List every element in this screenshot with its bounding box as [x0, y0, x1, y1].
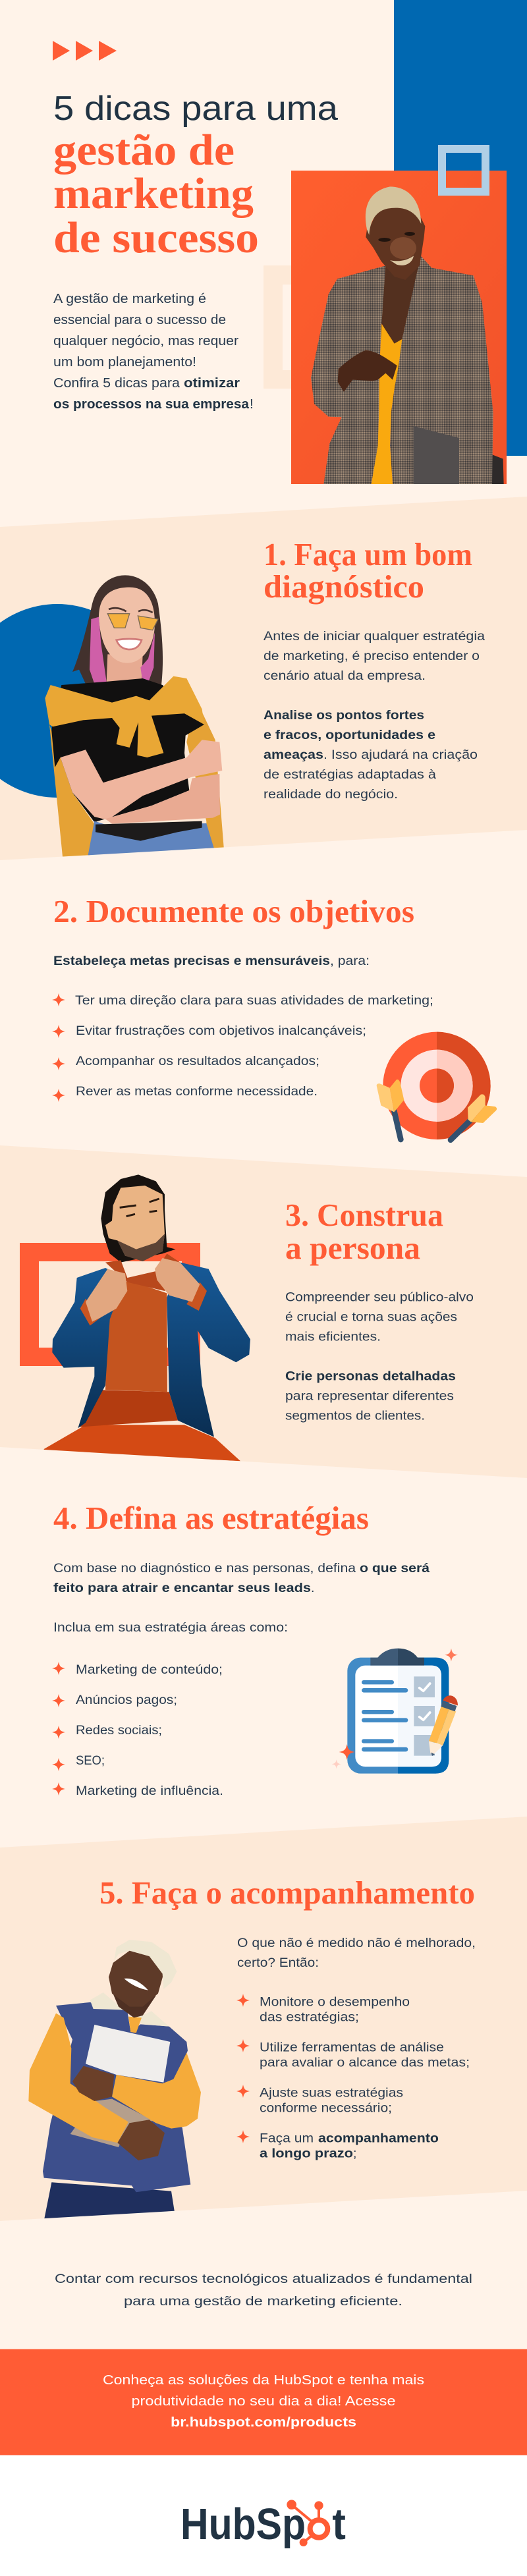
tip 5 list text: [260, 1994, 470, 2160]
tip 3 text: mais eficientes.: [285, 1329, 381, 1344]
left hand: [86, 1269, 127, 1322]
tip 3 text: Compreender seu público-alvo: [285, 1290, 474, 1304]
right sleeve: [112, 2053, 201, 2129]
tip 4 list text: Redes sociais;: [76, 1723, 162, 1738]
hand top: [72, 2066, 114, 2101]
tip 1 text: e fracos, oportunidades e: [264, 728, 435, 742]
smile: [117, 639, 142, 649]
tip 2 list text: Acompanhar os resultados alcançados;: [76, 1054, 319, 1068]
tip 1 heading: [264, 536, 472, 605]
glasses: [107, 614, 158, 630]
tip 2 intro: , para:: [330, 954, 370, 968]
blazer: [311, 256, 493, 484]
laptop back: [487, 453, 504, 484]
tip 5 list text: para avaliar o alcance das metas;: [260, 2055, 470, 2069]
pants waist: [79, 1390, 178, 1427]
hair: [72, 575, 163, 685]
tip 1 text: Analise os pontos fortes: [264, 708, 424, 723]
beard: [117, 1234, 165, 1261]
tip 1 text: ameaças: [264, 748, 323, 762]
tip 1 heading: diagnóstico: [264, 568, 424, 605]
left sleeve: [28, 2014, 128, 2143]
face: [99, 588, 155, 663]
icon: target with darts: [377, 1032, 497, 1140]
orange photo background: [291, 171, 507, 484]
tip 5 list text: conforme necessário;: [260, 2101, 392, 2116]
tip 5 heading: 5. Faça o acompanhamento: [99, 1875, 475, 1911]
sweater neck: [128, 2017, 142, 2033]
panel: call to action: produtividade no seu dia a dia! Acesse: [132, 2394, 395, 2409]
tip 4 list text: [76, 1662, 223, 1798]
tip 4 list bullets: [52, 1662, 65, 1795]
intro text: A gestão de marketing é: [53, 291, 206, 306]
tip 3 heading: [285, 1197, 443, 1266]
intro text: otimizar: [184, 375, 240, 391]
tip 4 heading: 4. Defina as estratégias: [53, 1500, 369, 1536]
t-shirt: [51, 678, 204, 822]
tip 2 heading: 2. Documente os objetivos: [53, 893, 414, 929]
sweater knot: [45, 676, 204, 757]
intro text: qualquer negócio, mas requer: [53, 333, 238, 348]
upper forearm: [61, 740, 222, 820]
belt: [96, 821, 202, 841]
dress: [372, 324, 402, 484]
hand bottom: [117, 2120, 165, 2160]
title: gestão de: [53, 126, 235, 175]
collar: [105, 1253, 180, 1291]
tip 4 intro: [53, 1561, 430, 1635]
panel: tip 5 band: [0, 1817, 527, 2221]
smile: [124, 1979, 148, 1990]
tip 3 text: para representar diferentes: [285, 1388, 454, 1403]
logo: HubSpot: HubSp: [180, 2500, 306, 2549]
lower forearm: [105, 774, 220, 824]
closing statement: Contar com recursos tecnológicos atualizados é fundamental: [55, 2272, 472, 2286]
tip 2 list bullets: [52, 993, 65, 1102]
tip 5 list text: Utilize ferramentas de análise: [260, 2041, 444, 2055]
tip 3 text: é crucial e torna suas ações: [285, 1309, 457, 1324]
tip 1 heading: 1. Faça um bom: [264, 536, 472, 572]
fleece collar: [90, 1992, 169, 2027]
tip 5 intro: [237, 1936, 476, 1970]
face: [109, 1951, 163, 2007]
orange square outline: [20, 1243, 200, 1366]
tip 3 heading: 3. Construa: [285, 1197, 443, 1233]
tip 5 list text: acompanhamento: [318, 2131, 439, 2146]
tip 1 text: de estratégias adaptadas à: [264, 767, 436, 782]
smile: [390, 256, 414, 265]
title: [53, 90, 338, 262]
logo: HubSpot: t: [332, 2500, 346, 2549]
beige square outline: [264, 265, 303, 389]
panel: hero: [0, 0, 527, 860]
tip 4 intro: feito para atrair e encantar seus leads: [53, 1581, 311, 1595]
tip 4 list text: Marketing de conteúdo;: [76, 1662, 223, 1677]
face highlight: [390, 237, 416, 259]
photo: man with laptop: [28, 1940, 201, 2221]
tip 2 list text: [75, 993, 433, 1099]
eye: [404, 232, 415, 236]
tip 5 list text: das estratégias;: [260, 2010, 359, 2025]
jeans: [44, 2182, 175, 2221]
tip 1 text: de marketing, é preciso entender o: [264, 649, 480, 663]
tip 5 list text: Monitore o desempenho: [260, 1994, 410, 2009]
tip 2 intro: Estabeleça metas precisas e mensuráveis: [53, 954, 330, 968]
icon: clipboard and pencil: [332, 1649, 458, 1774]
tip 1 text: Antes de iniciar qualquer estratégia: [264, 629, 485, 644]
neck: [113, 1994, 156, 2018]
tip 4 intro: Com base no diagnóstico e nas personas, defina: [53, 1561, 356, 1576]
intro text: essencial para o sucesso de: [53, 312, 226, 327]
blue rectangle: [394, 0, 527, 456]
sweater back: [49, 698, 224, 857]
tip 1 text: cenário atual da empresa.: [264, 669, 426, 683]
panel: tip 2: [52, 893, 497, 1140]
closing statement: para uma gestão de marketing eficiente.: [124, 2294, 402, 2309]
eyebrow: [109, 608, 153, 613]
tip 1 text: [264, 629, 485, 802]
tip 4 intro: .: [311, 1581, 314, 1595]
vest: [43, 2002, 190, 2192]
panel: call to action: Conheça as soluções da HubSpot e tenha mais: [103, 2373, 424, 2388]
tip 5 list text: Ajuste suas estratégias: [260, 2085, 403, 2100]
panel: tip 3 band: [0, 1145, 527, 1478]
panel: tip 4: [52, 1500, 458, 1798]
face: [105, 1186, 165, 1260]
tip 2 list text: Ter uma direção clara para suas atividades de marketing;: [75, 993, 433, 1008]
hair: [366, 186, 421, 235]
eyebrows and eyes: [120, 1199, 159, 1217]
panel: call to action: br.hubspot.com/products: [171, 2415, 356, 2430]
hair: [101, 1174, 176, 1263]
tip 4 list text: Anúncios pagos;: [76, 1693, 177, 1707]
title: de sucesso: [53, 213, 259, 262]
tip 5 list text: Faça um: [260, 2131, 314, 2146]
photo: woman with glasses: [45, 575, 224, 857]
pink hair strands: [90, 617, 155, 684]
sweater: [105, 1280, 167, 1392]
panel: call to action: [0, 2349, 527, 2455]
laptop: [414, 426, 459, 484]
jacket right: [167, 1263, 250, 1437]
footer background: [0, 2455, 527, 2576]
photo: man in blue blazer: [44, 1174, 250, 1461]
hat: [114, 1940, 177, 1989]
laptop bottom: [70, 2099, 153, 2147]
jacket left: [52, 1268, 113, 1428]
tip 4 intro: Inclua em sua estratégia áreas como:: [53, 1620, 288, 1635]
closing statement: [55, 2272, 472, 2309]
intro text: um bom planejamento!: [53, 354, 196, 370]
tip 1 text: . Isso ajudará na criação: [323, 748, 478, 762]
tip 3 text: segmentos de clientes.: [285, 1408, 425, 1423]
jeans: [88, 821, 214, 856]
light blue square outline: [438, 145, 489, 196]
eye: [378, 238, 391, 242]
title: marketing: [53, 169, 254, 218]
title: 5 dicas para uma: [53, 90, 338, 128]
tip 4 list text: Marketing de influência.: [76, 1784, 223, 1798]
intro text: os processos na sua empresa: [53, 397, 250, 412]
tip 3 text: Crie personas detalhadas: [285, 1369, 456, 1383]
tip 5 intro: O que não é medido não é melhorado,: [237, 1936, 476, 1950]
tip 5 list text: ;: [353, 2146, 356, 2160]
laptop top: [86, 2025, 170, 2083]
tip 4 intro: o que será: [360, 1561, 430, 1576]
intro text: Confira 5 dicas para: [53, 375, 180, 391]
neck and chest: [381, 259, 421, 346]
tip 2 list text: Evitar frustrações com objetivos inalcançáveis;: [76, 1024, 366, 1038]
tip 1 text: realidade do negócio.: [264, 787, 398, 802]
arrows icon: [53, 41, 117, 61]
intro text: [53, 291, 254, 412]
tip 5 intro: certo? Então:: [237, 1956, 319, 1970]
face: [366, 207, 425, 280]
blue circle: [0, 604, 154, 798]
tip 5 list text: a longo prazo: [260, 2146, 353, 2160]
right hand: [155, 1258, 200, 1302]
pants: [44, 1425, 240, 1461]
tip 4 list text: SEO;: [76, 1753, 105, 1768]
panel: tip 1 band: [0, 497, 527, 860]
tip 3 text: [285, 1290, 474, 1423]
photo: woman in checked blazer: [311, 186, 504, 484]
tip 5 list bullets: [236, 1994, 250, 2143]
neck: [107, 654, 143, 683]
intro text: !: [250, 397, 254, 412]
cuffs: [80, 1282, 207, 1326]
hand: [338, 350, 397, 392]
tip 3 heading: a persona: [285, 1230, 420, 1266]
tip 2 list text: Rever as metas conforme necessidade.: [76, 1084, 318, 1099]
